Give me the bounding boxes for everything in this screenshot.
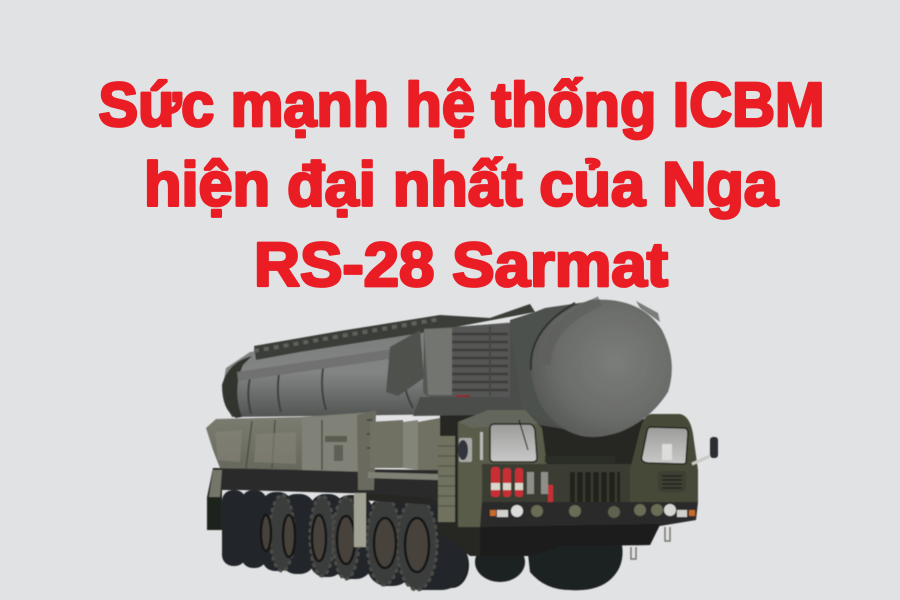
grey ribbed equipment box	[423, 323, 510, 399]
title: Sức mạnh hệ thống ICBM	[98, 71, 824, 140]
icon: RS-28 Sarmat missile launcher truck	[206, 300, 718, 590]
upper pipe	[237, 345, 423, 381]
side door window	[459, 438, 472, 462]
launcher side panels	[206, 410, 440, 547]
canister segments	[248, 360, 413, 414]
right truck cab	[630, 414, 718, 502]
title: hiện đại nhất của Nga	[144, 150, 778, 220]
tyre faces with mud	[270, 495, 437, 590]
missile canister body	[224, 320, 560, 424]
upper ribbed rail	[254, 304, 535, 360]
dark backing behind cabs	[360, 400, 660, 556]
equipment bay behind extinguishers	[482, 464, 554, 504]
title: RS-28 Sarmat	[254, 231, 668, 300]
missile nose section	[510, 300, 672, 437]
left truck cab	[438, 410, 554, 527]
radiator grille	[545, 456, 632, 503]
right cab window	[642, 427, 688, 464]
mud patches	[215, 430, 296, 464]
front bumper with lights	[480, 502, 698, 559]
title	[98, 71, 824, 300]
chassis underframe	[207, 468, 440, 530]
right vent	[658, 471, 686, 492]
fire extinguishers	[491, 467, 553, 502]
side ladder	[438, 436, 455, 522]
wheel hubs	[261, 515, 429, 572]
bracket	[386, 330, 424, 396]
launcher wheels	[222, 490, 467, 590]
cab window	[490, 424, 537, 462]
rear ring	[222, 356, 252, 418]
tube section under box	[413, 312, 570, 430]
front undercarriage wheels	[435, 542, 623, 590]
right wing mirror	[710, 437, 718, 458]
